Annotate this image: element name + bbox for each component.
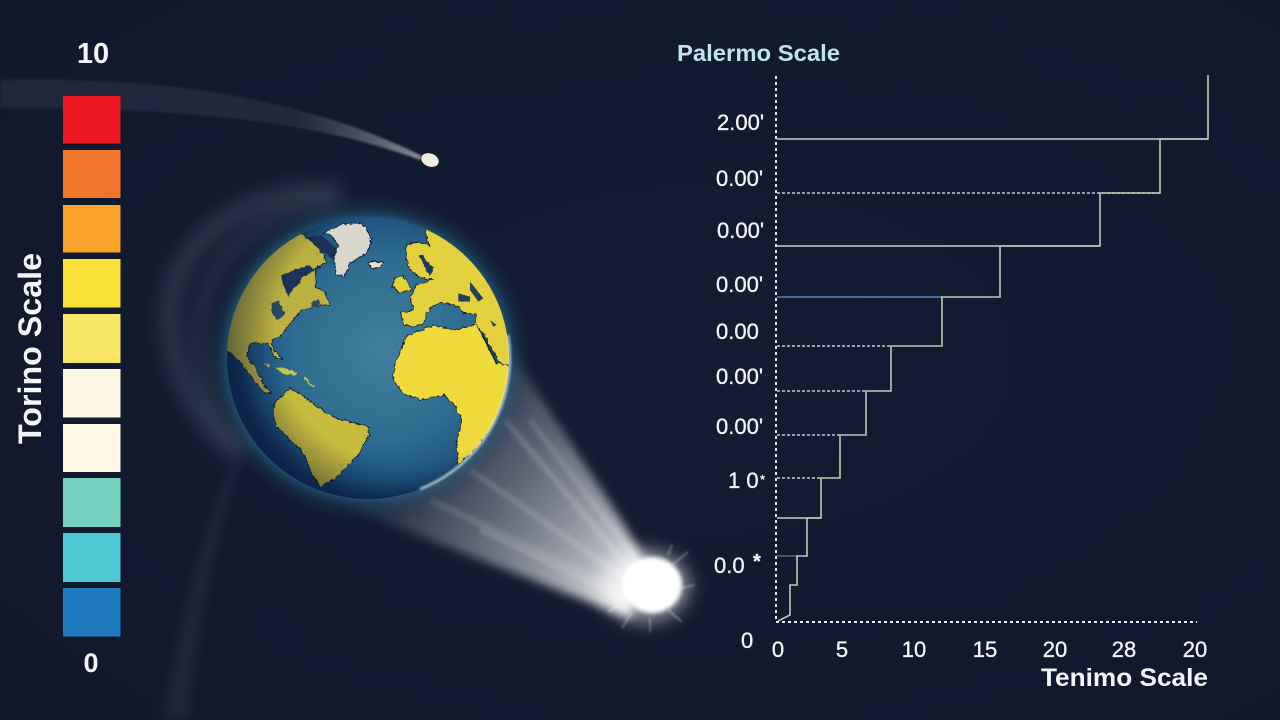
- Africa: [393, 325, 517, 465]
- Torino Scale vertical label: Torino Scale: [12, 253, 48, 444]
- Torino axis labels: 15: [973, 637, 997, 662]
- Hudson Bay: [282, 265, 315, 297]
- Torino axis labels: [772, 637, 1207, 662]
- Arctic islands: [307, 235, 338, 260]
- Torino Scale x-axis title: Tenimo Scale: [1041, 664, 1208, 692]
- swirl around Earth: [170, 191, 340, 455]
- Eurasia: [401, 223, 523, 377]
- Earth globe: [203, 193, 533, 523]
- Palermo axis labels: *: [753, 551, 761, 573]
- comet tail: [345, 352, 645, 618]
- Palermo axis labels: 0.00: [716, 319, 759, 344]
- Palermo axis labels: 0.00': [717, 218, 764, 243]
- step chart: [776, 75, 1208, 622]
- Palermo axis labels: [714, 110, 765, 653]
- bottom value label: 0: [83, 648, 99, 678]
- North America: [220, 233, 330, 393]
- Palermo axis labels: *: [760, 472, 765, 487]
- top value label: 10: [77, 38, 109, 70]
- icon: small asteroid: [419, 151, 441, 169]
- Palermo axis labels: 0.00': [716, 414, 763, 439]
- asteroid orbit trail: [0, 79, 441, 169]
- Great Lakes: [272, 300, 320, 320]
- lower orbit streak: [163, 458, 240, 720]
- Torino axis labels: 10: [902, 637, 926, 662]
- Torino axis labels: 20: [1043, 637, 1067, 662]
- Palermo axis labels: 0.00': [716, 272, 763, 297]
- Palermo axis labels: 2.00': [717, 110, 764, 135]
- Palermo axis labels: 0: [741, 628, 753, 653]
- Torino axis labels: 0: [772, 637, 784, 662]
- United Kingdom: [393, 276, 412, 293]
- Iceland: [368, 262, 383, 268]
- axes: [776, 76, 1197, 622]
- Caribbean islands: [263, 363, 315, 388]
- Baltic Sea: [418, 255, 433, 277]
- bright rim: [420, 335, 510, 489]
- Greenland: [323, 223, 372, 277]
- Palermo axis labels: 1 0: [728, 468, 759, 493]
- Torino axis labels: 28: [1112, 637, 1136, 662]
- Palermo axis labels: 0.00': [716, 364, 763, 389]
- Palermo axis labels: 0.0: [714, 553, 745, 578]
- horizontal levels: [777, 139, 1208, 556]
- Torino axis labels: 5: [836, 637, 848, 662]
- Palermo axis labels: 0.00': [716, 166, 763, 191]
- South America: [273, 388, 370, 487]
- Palermo Scale title: Palermo Scale: [677, 40, 840, 66]
- staircase line: [778, 75, 1208, 621]
- comet head: [601, 545, 695, 632]
- Torino Scale colour bar: [63, 38, 120, 678]
- Torino axis labels: 20: [1183, 637, 1207, 662]
- Red Sea: [482, 333, 497, 363]
- Caspian and inland seas: [458, 282, 497, 327]
